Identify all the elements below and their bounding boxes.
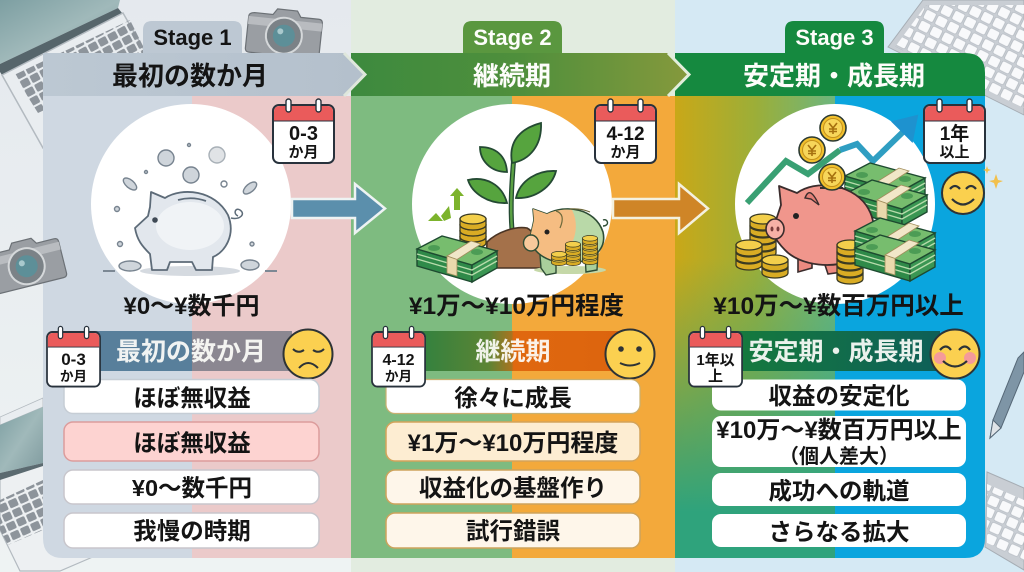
calendar: 1年以 [696, 351, 735, 369]
stage 1 header text: 最初の数か月 [112, 61, 268, 91]
row 2 two lines: ¥10万〜¥数百万円以上 [716, 417, 962, 444]
income label: stage 1: ¥0〜¥数千円 [123, 293, 260, 320]
icon: stage 3 smiling face with sparkles [942, 166, 1003, 214]
laptop bottom left [0, 398, 95, 571]
icon: soil mound [486, 228, 548, 268]
icon: falling grey coins [114, 144, 259, 271]
row 3: 成功への軌道 [768, 478, 910, 504]
row 1 [712, 380, 966, 410]
icon: lower banknote stack [855, 218, 935, 281]
arrow: stage 2 to stage 3 [613, 184, 708, 233]
row 3 [386, 470, 640, 504]
stage 1 body [43, 96, 351, 558]
stage 1 tab label: Stage 1 [153, 25, 232, 50]
calendar [47, 326, 100, 387]
stage 3 header text: 安定期・成長期 [743, 61, 925, 91]
row 3: 収益化の基盤作り [419, 475, 607, 501]
camera left overlapping panel [0, 232, 67, 295]
calendar: か月 [385, 369, 412, 384]
sub-header bar [735, 331, 940, 371]
row 3 [712, 473, 966, 506]
row 4: さらなる拡大 [768, 519, 910, 545]
row 1: 徐々に成長 [454, 385, 572, 411]
sub-header text: 安定期・成長期 [748, 338, 924, 366]
circle: stage 3 illustration [735, 104, 935, 304]
row 4: 試行錯誤 [466, 518, 560, 544]
calendar: stage 3 duration: 以上 [939, 144, 970, 161]
circle: stage 2 illustration [412, 104, 612, 304]
icon: banknote stack [417, 236, 497, 282]
calendar: stage 2 duration: か月 [610, 144, 641, 161]
row 2 two lines: （個人差大） [779, 445, 899, 468]
stage 3 header bar [675, 53, 985, 96]
icon: empty piggy bank [135, 192, 242, 276]
row 4 [64, 513, 319, 548]
row 4: 我慢の時期 [133, 518, 251, 544]
row 3 [64, 470, 319, 504]
stage 3 tab label: Stage 3 [795, 25, 874, 50]
icon: sad face [284, 330, 332, 378]
section: stage 2 summary [372, 326, 654, 548]
row 1: 収益の安定化 [768, 383, 910, 409]
income label: stage 2: ¥1万〜¥10万円程度 [409, 292, 624, 320]
icon: small growth arrows [428, 188, 464, 221]
row 1 [386, 380, 640, 414]
stage 2 body [351, 96, 675, 558]
stage 3 body [675, 96, 985, 558]
stage 2 tab [463, 21, 562, 53]
row 1: ほぼ無収益 [133, 385, 251, 411]
row 4 [386, 513, 640, 548]
icon: upper banknote stack [845, 163, 927, 226]
calendar [372, 326, 425, 387]
income label: stage 3: ¥10万〜¥数百万円以上 [713, 292, 964, 320]
laptop top left [0, 0, 170, 148]
ground dashes [103, 270, 279, 272]
sub-header bar [92, 331, 292, 371]
keyboard bottom right [985, 472, 1024, 570]
row 3: ¥0〜数千円 [132, 475, 252, 501]
stage 1 header arrow [43, 53, 365, 96]
row 2 highlighted: ¥1万〜¥10万円程度 [408, 430, 618, 457]
calendar: stage 1 duration: 0-3 [289, 123, 318, 145]
icon: gold coin stack [460, 214, 486, 248]
calendar: stage 3 duration [924, 99, 985, 163]
row 2 highlighted [64, 422, 319, 461]
icon: pink piggy bank [766, 185, 874, 274]
icon: yen coins [799, 115, 846, 190]
stage 3 tab [785, 21, 884, 53]
icon: happy blushing face [930, 330, 980, 378]
sub-header text: 最初の数か月 [116, 338, 266, 366]
calendar: stage 3 duration: 1年 [940, 122, 969, 145]
stage 1 tab [143, 21, 242, 53]
row 1 [64, 380, 319, 414]
calendar: 4-12 [382, 352, 415, 369]
row 2 highlighted [386, 422, 640, 461]
keyboard top right [888, 0, 1024, 115]
calendar [689, 326, 742, 387]
icon: plant sprout [468, 123, 556, 230]
stage 2 header text: 継続期 [473, 61, 551, 91]
icon: growing piggy bank [524, 209, 608, 275]
panel: stage 2 [351, 21, 689, 558]
calendar: か月 [60, 369, 87, 384]
sub-header bar [415, 331, 625, 371]
calendar: 0-3 [61, 350, 86, 369]
section: stage 3 summary [689, 326, 980, 547]
panel: stage 3 [675, 21, 985, 558]
icon: neutral smile face [606, 330, 654, 378]
stage 2 tab label: Stage 2 [473, 25, 552, 50]
row 2 two lines [712, 416, 966, 468]
sub-header text: 継続期 [475, 338, 551, 366]
calendar: stage 1 duration: か月 [288, 144, 319, 161]
panel: stage 1 [43, 21, 365, 558]
icon: gold coin stacks [736, 240, 863, 284]
icon: rising trend arrow [747, 116, 917, 203]
calendar: 上 [708, 368, 723, 385]
section: stage 1 summary [47, 326, 332, 548]
row 2 highlighted: ほぼ無収益 [133, 430, 251, 456]
stage 2 header arrow [351, 53, 689, 96]
calendar: stage 2 duration: 4-12 [606, 124, 645, 145]
calendar: stage 1 duration [273, 99, 334, 163]
pen [990, 352, 1024, 438]
circle: stage 1 illustration [91, 104, 291, 304]
arrow: stage 1 to stage 2 [292, 184, 385, 233]
row 4 [712, 514, 966, 547]
camera top [245, 6, 323, 59]
icon: tall coin stack behind pig [750, 214, 776, 258]
calendar: stage 2 duration [595, 99, 656, 163]
